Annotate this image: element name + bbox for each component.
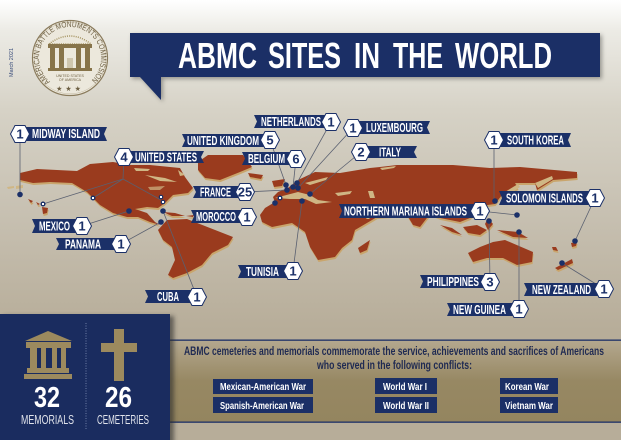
label: Philippines: PHILIPPINES <box>427 275 479 289</box>
title <box>178 35 552 76</box>
seas and lakes <box>7 166 553 219</box>
conflict: World War II <box>375 397 437 413</box>
label: Panama: 1 <box>117 236 125 252</box>
conflict: Vietnam War <box>500 397 558 413</box>
date note: March 2021 <box>9 48 15 77</box>
label: Tunisia: 1 <box>289 264 297 278</box>
title: SITES <box>268 35 341 76</box>
icon: cross <box>101 329 137 381</box>
label: Midway Island: 1 <box>16 126 24 142</box>
description text: who served in the following conflicts: <box>316 358 472 372</box>
conflict: World War II: World War II <box>383 400 429 412</box>
label: Morocco: MOROCCO <box>196 210 236 224</box>
panel: conflicts <box>165 340 621 423</box>
label: South Korea: SOUTH KOREA <box>507 134 564 148</box>
conflict: Korean War: Korean War <box>505 381 549 393</box>
logo: ABMC seal: UNITED STATES <box>56 74 85 78</box>
label: United Kingdom: 5 <box>266 132 274 148</box>
label: Luxembourg <box>344 120 430 136</box>
label: Panama <box>56 236 130 252</box>
label: Mexico: 1 <box>78 218 86 234</box>
label: Philippines: 3 <box>486 274 494 290</box>
title: IN <box>354 35 380 76</box>
label: New Guinea: 1 <box>515 302 523 316</box>
title: THE <box>393 35 443 76</box>
land shadow <box>21 157 578 280</box>
memorials label: MEMORIALS <box>21 412 74 427</box>
title banner <box>130 33 602 102</box>
memorials count: 32 <box>34 382 60 414</box>
label: Cuba: 1 <box>193 290 201 304</box>
label: Cuba: CUBA <box>157 290 179 304</box>
conflict: Spanish-American War <box>213 397 313 413</box>
conflict: Vietnam War: Vietnam War <box>505 400 553 412</box>
conflict: Mexican-American War <box>213 379 313 394</box>
label: Solomon Islands: 1 <box>591 190 599 206</box>
cemeteries count: 26 <box>105 382 132 414</box>
label: Northern Mariana Islands: 1 <box>476 204 484 218</box>
label: United Kingdom: UNITED KINGDOM <box>187 134 259 148</box>
icon: memorial building <box>24 331 72 379</box>
label: South Korea: 1 <box>490 132 498 148</box>
label: Netherlands: NETHERLANDS <box>261 115 321 129</box>
label: France: 25 <box>238 184 252 200</box>
label: Solomon Islands <box>499 190 604 206</box>
label: Mexico <box>32 218 92 234</box>
label: Netherlands <box>254 114 340 130</box>
label: Northern Mariana Islands: NORTHERN MARIANA ISLANDS <box>344 204 467 218</box>
label: United States: UNITED STATES <box>135 150 197 164</box>
label: Belgium: 6 <box>292 152 300 166</box>
label: Italy: ITALY <box>379 146 401 160</box>
conflict: World War I <box>375 378 437 394</box>
label: United Kingdom <box>182 132 280 148</box>
logo: ABMC seal: ★★★ <box>56 85 84 93</box>
label: United States <box>114 148 204 166</box>
conflict: World War I: World War I <box>383 381 427 393</box>
title: WORLD <box>455 35 552 76</box>
land <box>20 155 577 278</box>
conflict: Spanish-American War: Spanish-American War <box>220 400 304 412</box>
cemeteries label: CEMETERIES <box>97 412 149 427</box>
label: Mexico: MEXICO <box>39 220 70 234</box>
label: Luxembourg: 1 <box>349 120 357 136</box>
label: Panama: PANAMA <box>65 238 101 252</box>
logo: ABMC seal: OF AMERICA <box>59 78 82 82</box>
label: Tunisia: TUNISIA <box>246 265 279 279</box>
label: Italy: 2 <box>357 144 365 160</box>
label: Italy <box>352 144 417 160</box>
label: Luxembourg: LUXEMBOURG <box>366 121 423 135</box>
label: Cuba <box>145 288 206 306</box>
logo: ABMC seal: AMERICAN BATTLE MONUMENTS COMMISSION <box>34 21 106 84</box>
conflict: Korean War <box>500 378 558 394</box>
label: New Guinea: NEW GUINEA <box>453 303 506 317</box>
conflict: Mexican-American War: Mexican-American War <box>220 381 306 393</box>
label: Netherlands: 1 <box>327 114 335 130</box>
site markers <box>17 180 578 266</box>
label: United States: 4 <box>120 150 128 164</box>
label: Midway Island <box>10 126 107 142</box>
label: France <box>193 184 254 200</box>
label: New Zealand: 1 <box>600 282 608 296</box>
leader lines <box>20 122 604 309</box>
label: Belgium: BELGIUM <box>248 152 285 166</box>
world map <box>7 155 578 280</box>
panel: totals <box>0 314 174 440</box>
label: Tunisia <box>238 262 302 280</box>
label: Morocco: 1 <box>243 210 251 224</box>
label: South Korea <box>484 132 571 148</box>
label: Northern Mariana Islands <box>339 202 490 220</box>
label: Midway Island: MIDWAY ISLAND <box>32 127 100 141</box>
label: France: FRANCE <box>200 186 231 200</box>
title: ABMC <box>178 35 257 76</box>
